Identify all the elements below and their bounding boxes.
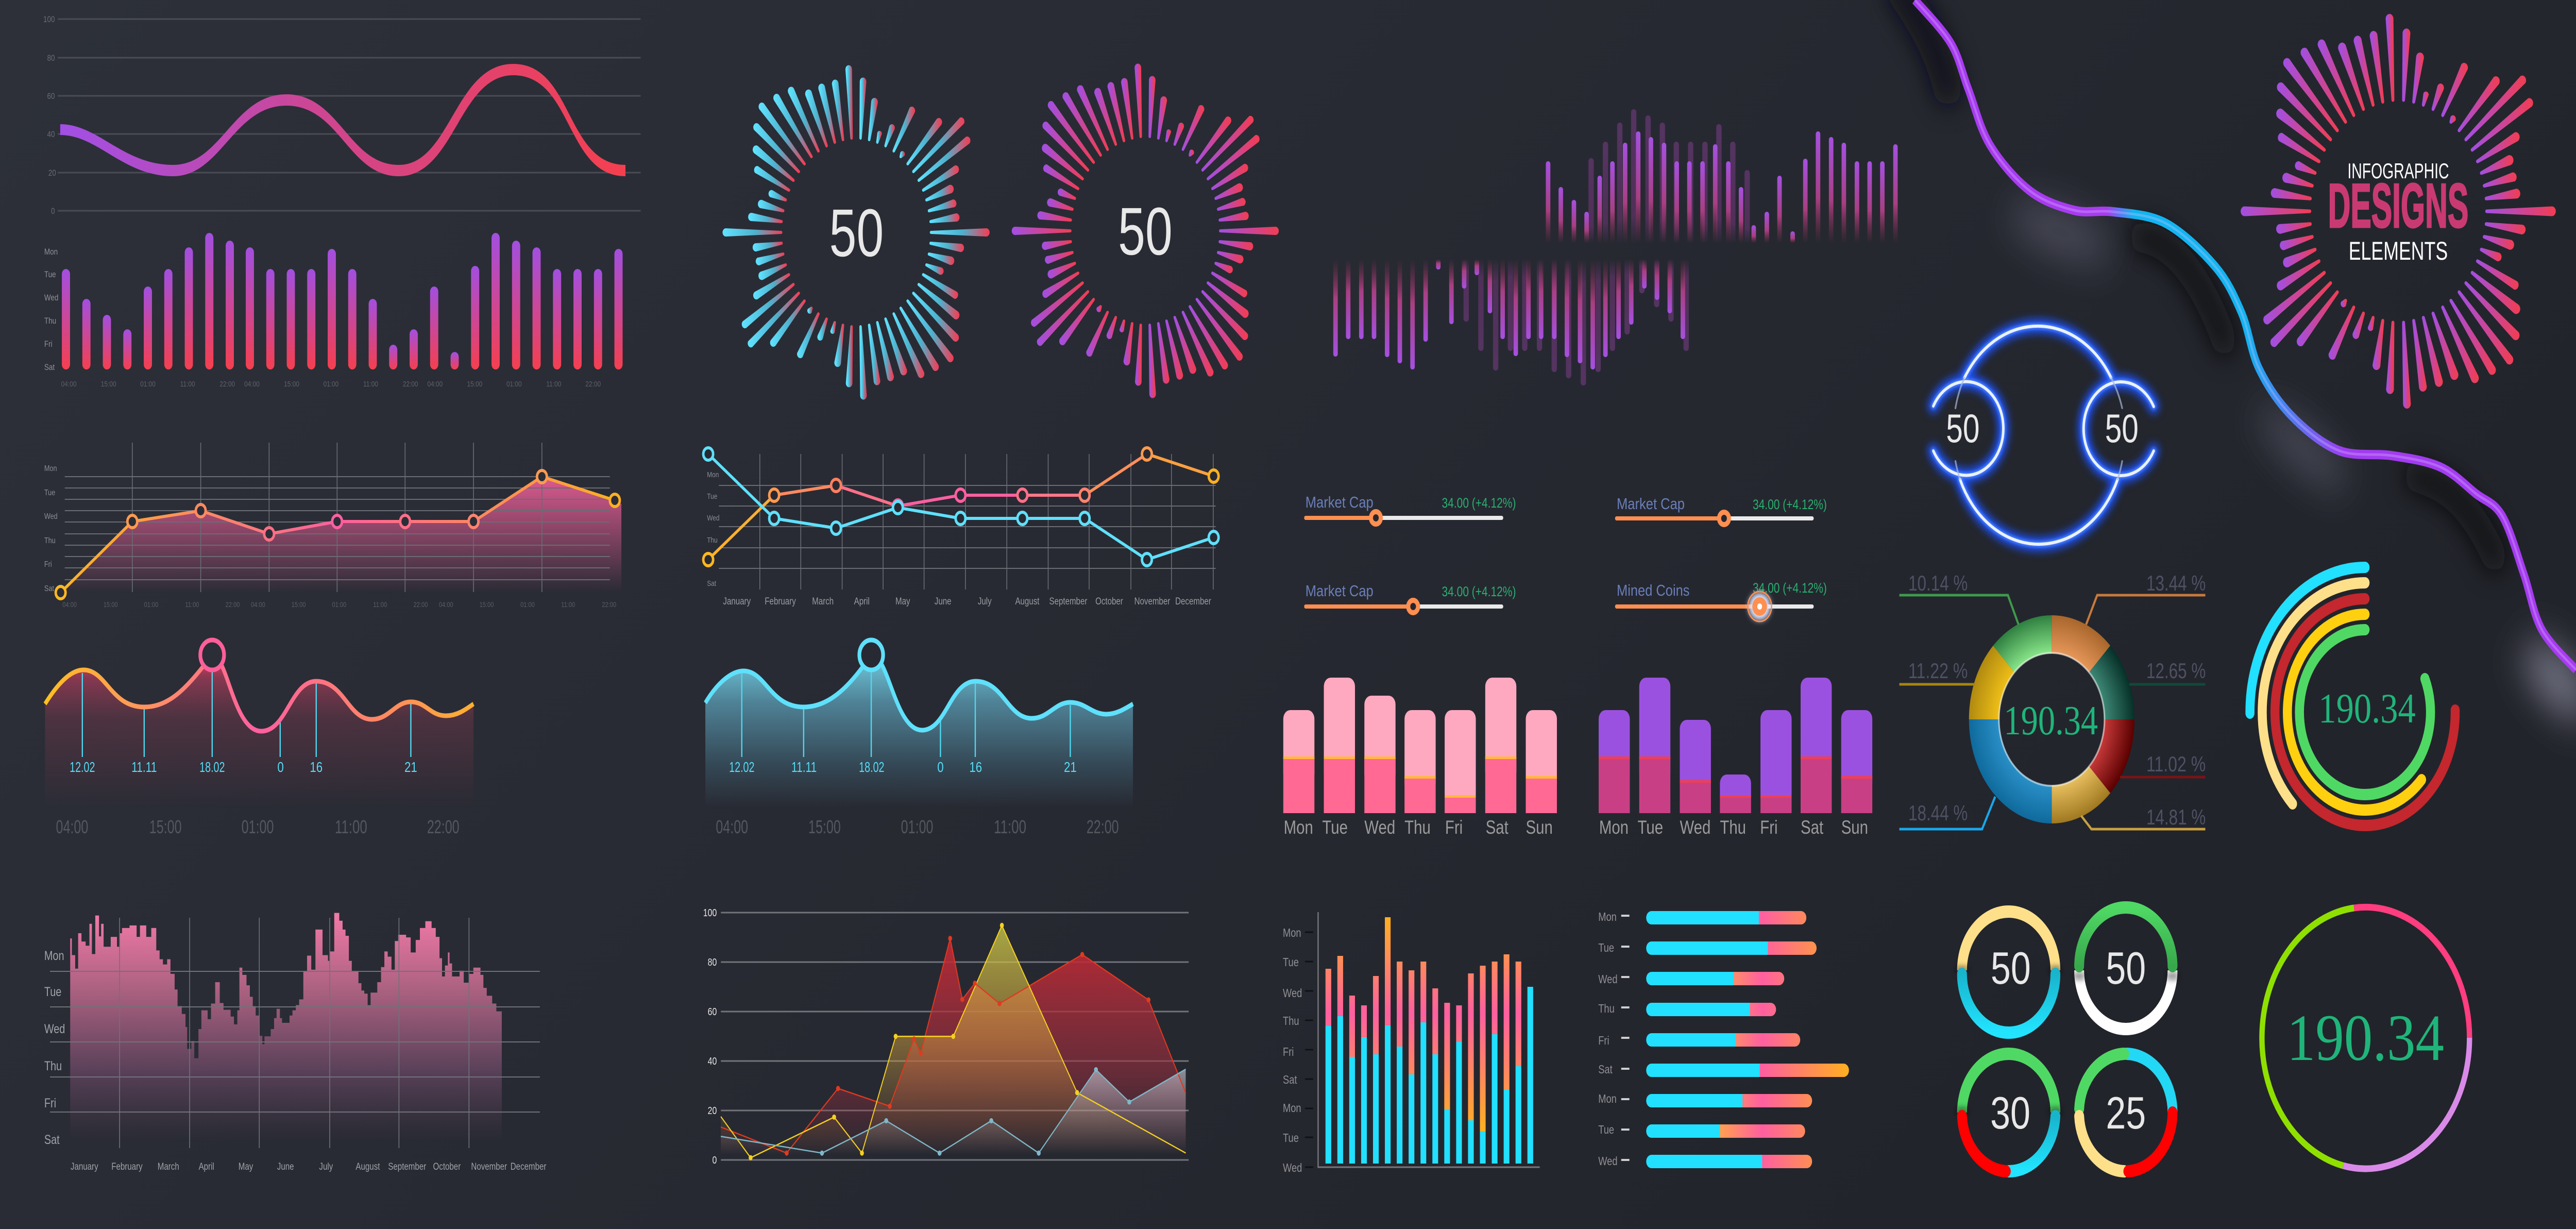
labels: Thu [707,536,718,544]
times: 11:00 [994,817,1026,837]
panel: purple stacked bars [1599,678,1872,838]
panel: cyan smooth area [705,640,1133,837]
labels: Tue [1322,817,1348,838]
labels: Mon [1284,817,1313,838]
small ring: 25 [2079,1054,2173,1171]
slider: mined coins [1617,581,1827,621]
slider: market cap 1 [1306,493,1516,524]
labels: May [895,595,910,607]
labels: April [854,595,870,607]
labels: 15:00 [480,601,494,609]
labels: Mon [44,464,57,473]
bar chart labels: 01:00 [140,380,156,388]
labels: July [319,1160,333,1172]
axis labels: 0 [712,1154,717,1166]
donut percentages: 18.44 % [1908,801,1968,826]
labels [1283,927,1302,1175]
times: 22:00 [427,817,460,837]
labels: Fri [44,1096,56,1110]
labels: Fri [1760,817,1778,838]
labels: Wed [1680,817,1710,838]
title: infographic designs elements: INFOGRAPHIC [2347,159,2449,183]
wave ribbon [60,64,625,176]
panel: wavy divider line with shadows [1901,0,2576,731]
values: 12.02 [70,760,95,776]
cyan line [703,448,1218,566]
lower bars [1283,757,1557,813]
wave chart axis labels: 60 [47,92,55,101]
labels: November [471,1160,507,1172]
neon value right: 50 [2105,406,2139,451]
panel: mirrored bars [1333,109,1897,385]
labels: 22:00 [226,601,240,609]
labels: Wed [1598,973,1617,986]
slider: market cap 1: 34.00 (+4.12%) [1442,496,1516,511]
labels: Mon [1598,911,1617,924]
labels: Mon [1283,1102,1301,1115]
labels: January [71,1160,98,1172]
value: 50 [1991,942,2031,994]
small ring: 50 cream and cyan [1962,912,2056,1033]
labels [1598,911,1617,1168]
donut segments [1969,615,2134,823]
series [721,923,1185,1160]
labels: December [511,1160,547,1172]
labels: April [199,1160,214,1172]
panel: big circle [2262,907,2469,1169]
wave chart axis labels: 0 [51,207,55,216]
labels: Sat [1283,1073,1297,1087]
radial burst: purple [1013,65,1278,397]
panel: wave line chart [43,15,640,216]
panel: horizontal stacked bars [1598,911,1849,1168]
ticks [1305,932,1313,1167]
labels: 04:00 [439,601,453,609]
slider: market cap 3 [1306,582,1516,613]
labels: Sat [44,584,54,593]
times: 15:00 [149,817,182,837]
labels: 01:00 [144,601,158,609]
bar chart labels: Sat [44,363,55,372]
labels [1284,817,1553,838]
labels: Tue [1598,941,1614,955]
donut percentages: 12.65 % [2146,659,2206,683]
bars lower [1333,259,1685,369]
bar chart labels: 15:00 [467,380,482,388]
values: 0 [937,760,944,776]
value: 30 [1990,1087,2030,1138]
small ring: 30 [1962,1054,2056,1171]
bar heads [1646,911,1768,1168]
labels: Mon [1283,927,1301,940]
bar chart labels: 22:00 [585,380,601,388]
bar chart labels: 11:00 [180,380,195,388]
labels: Wed [1283,1161,1302,1175]
labels: Wed [1598,1155,1617,1168]
values [729,760,1077,776]
times: 01:00 [901,817,933,837]
labels: Sat [1486,817,1509,838]
labels: Sat [44,1133,60,1147]
labels: October [433,1160,461,1172]
labels: September [388,1160,426,1172]
values: 11.11 [791,760,817,776]
labels: Thu [1283,1015,1299,1028]
title: infographic designs elements [2328,159,2468,265]
labels: Tue [1283,956,1299,969]
labels: February [111,1160,143,1172]
labels: Mon [707,470,719,479]
bar chart labels: 22:00 [219,380,235,388]
slider: market cap 2 [1617,495,1827,525]
split markers [1283,756,1557,798]
times: 22:00 [1087,817,1119,837]
donut value: 190.34 [2004,698,2098,744]
bar chart labels: 01:00 [323,380,338,388]
upper bars [1599,678,1872,805]
labels: Sat [1598,1063,1613,1076]
times: 15:00 [808,817,841,837]
labels: Sun [1841,817,1868,838]
burst value: 50 [1118,194,1173,270]
labels: 22:00 [414,601,428,609]
labels [44,949,547,1172]
axes [1318,912,1540,1167]
bar chart labels: 04:00 [244,380,260,388]
times: 04:00 [56,817,88,837]
slider: market cap 3: Market Cap [1306,582,1374,600]
bar chart labels: Fri [44,340,53,349]
labels: 11:00 [561,601,575,609]
labels: 04:00 [62,601,77,609]
labels: Mon [1598,1092,1617,1106]
ghost bars lower [1464,259,1689,385]
radial burst: cyan [724,66,988,398]
bars [62,233,622,369]
bar tails [1700,911,1849,1168]
labels: June [277,1160,294,1172]
lower bars [1599,757,1872,813]
labels: Tue [44,985,61,999]
labels: Fri [44,560,52,569]
times: 01:00 [242,817,274,837]
split markers [1599,756,1872,798]
markers [56,470,620,599]
labels: December [1175,595,1211,607]
ticks [1621,916,1630,1160]
arcs value: 190.34 [2318,685,2416,732]
labels: 22:00 [602,601,616,609]
bar chart labels: 15:00 [101,380,116,388]
labels: Wed [44,1022,65,1036]
labels: August [1015,595,1040,607]
panel: concentric arcs [2250,567,2455,826]
bar chart labels: Wed [44,293,58,302]
donut percentages: 11.22 % [1908,659,1968,683]
slider: market cap 2: Market Cap [1617,495,1685,513]
panel: two-line chart [703,448,1218,607]
axis labels: 80 [708,956,717,968]
slider: market cap 1: Market Cap [1306,493,1374,511]
wave chart axis labels: 40 [47,130,55,139]
labels: 15:00 [104,601,118,609]
labels: 04:00 [251,601,265,609]
labels: June [935,595,952,607]
labels [707,470,1211,607]
donut percentages: 13.44 % [2146,571,2206,596]
labels: 01:00 [520,601,535,609]
orange line [703,448,1218,566]
axis labels: 60 [708,1006,717,1017]
slider: mined coins: Mined Coins [1617,581,1690,599]
times: 11:00 [335,817,367,837]
donut leaders [1900,595,2205,829]
value: 50 [2106,942,2146,994]
upper columns [1326,917,1521,1131]
bar chart labels: 15:00 [284,380,299,388]
panel: pink smooth area [45,640,473,837]
peak marker [859,640,883,670]
curve [45,655,473,731]
labels: March [158,1160,179,1172]
labels: Thu [44,1059,62,1073]
labels: Fri [707,557,714,565]
labels: January [723,595,751,607]
title: infographic designs elements: ELEMENTS [2349,237,2448,265]
donut percentages: 11.02 % [2146,752,2206,777]
labels: November [1134,595,1171,607]
values [70,760,417,776]
panel: stacked column chart [1283,912,1540,1175]
labels: 11:00 [373,601,387,609]
wave chart axis labels [43,15,56,216]
title burst [2242,16,2554,407]
bar chart labels: 04:00 [427,380,443,388]
line [61,477,615,593]
panel: layered area chart [703,907,1189,1166]
labels: Mon [1599,817,1629,838]
panel: vertical bar chart [44,233,622,388]
labels: Tue [1283,1132,1299,1145]
peak marker [200,640,224,670]
value: 25 [2106,1087,2146,1138]
neon rings [1934,326,2154,544]
labels: Wed [707,514,720,522]
axis labels: 20 [708,1105,717,1116]
labels: Wed [44,512,58,521]
labels: Thu [1404,817,1431,838]
labels: Fri [1598,1034,1609,1048]
labels: May [239,1160,253,1172]
values: 12.02 [729,760,754,776]
bar chart labels: 11:00 [546,380,561,388]
labels: 15:00 [292,601,306,609]
labels: Thu [1720,817,1746,838]
bar chart labels [44,247,601,388]
labels: August [355,1160,380,1172]
labels [44,464,616,609]
labels [1599,817,1868,838]
burst value: 50 [829,196,884,271]
labels: Wed [1283,987,1302,1000]
labels: Tue [1638,817,1663,838]
slider: market cap 2: 34.00 (+4.12%) [1753,497,1827,513]
axis labels [703,907,717,1166]
upper bars [1283,678,1557,803]
slider: mined coins: 34.00 (+4.12%) [1753,581,1827,596]
axis labels: 40 [708,1055,717,1067]
labels: 01:00 [332,601,346,609]
small ring: 50 green and white [2079,907,2173,1029]
donut percentages: 14.81 % [2146,805,2206,830]
ghost bars upper [1588,109,1750,243]
labels: February [765,595,796,607]
panel: sliders [1306,493,1827,621]
panel: stepped area chart [44,913,547,1172]
bar chart labels: Tue [44,270,56,279]
donut percentages: 10.14 % [1908,571,1968,596]
bar chart labels: Thu [44,316,56,326]
bars upper [1546,131,1897,243]
labels: July [978,595,992,607]
bar chart labels: 01:00 [506,380,522,388]
labels: Tue [1598,1123,1614,1137]
cyan columns [1326,987,1533,1164]
bar chart labels: Mon [44,247,58,257]
values: 21 [1064,760,1077,776]
curve [705,655,1133,730]
labels: Mon [44,949,64,963]
labels: October [1095,595,1123,607]
times [56,817,460,837]
values: 21 [404,760,417,776]
wave chart axis labels: 80 [47,54,55,63]
bar chart labels: 04:00 [61,380,76,388]
labels: Sat [707,579,716,587]
bar chart labels: 22:00 [403,380,418,388]
labels: Sun [1526,817,1553,838]
panel: segmented donut [1900,571,2206,830]
labels: Fri [1445,817,1463,838]
values: 0 [277,760,284,776]
labels: Tue [44,489,55,497]
labels: March [812,595,834,607]
values: 11.11 [131,760,157,776]
labels: September [1049,595,1088,607]
neon value left: 50 [1946,406,1979,451]
big circle value: 190.34 [2287,1002,2444,1075]
donut percentages [1908,571,2206,830]
wave chart axis labels: 100 [43,15,55,24]
labels: Thu [44,536,56,545]
axis labels: 100 [703,907,717,918]
labels: Sat [1801,817,1824,838]
title: infographic designs elements: DESIGNS [2328,171,2468,241]
wave chart axis labels: 20 [48,169,56,178]
panel: area line chart [44,443,621,609]
values: 16 [310,760,323,776]
times: 04:00 [716,817,748,837]
bar chart labels: 11:00 [363,380,378,388]
values: 18.02 [859,760,884,776]
labels: Thu [1598,1002,1615,1016]
panel: pink stacked bars [1283,678,1557,838]
labels: Wed [1364,817,1395,838]
values: 18.02 [199,760,225,776]
labels: Fri [1283,1046,1294,1059]
values: 16 [969,760,982,776]
drop lines [742,671,1070,757]
slider: market cap 3: 34.00 (+4.12%) [1442,584,1516,600]
times [716,817,1119,837]
labels: 11:00 [185,601,199,609]
drop lines [82,671,411,757]
labels: Tue [707,492,717,500]
